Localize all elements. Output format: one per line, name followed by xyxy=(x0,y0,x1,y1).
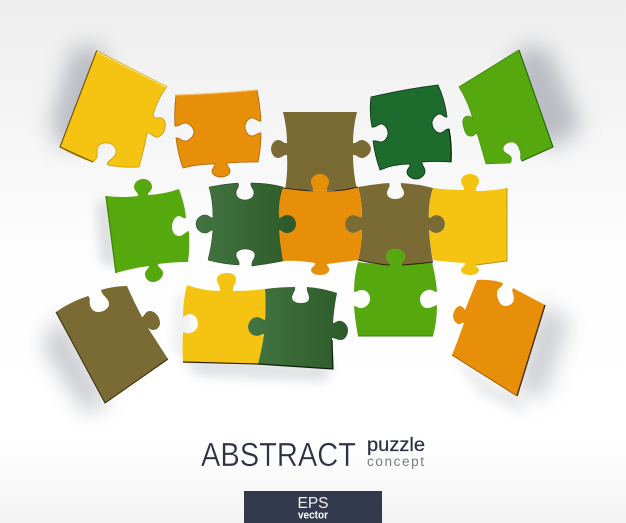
puzzle piece: olive top centre xyxy=(271,112,371,190)
title: ABSTRACT: ABSTRACT xyxy=(201,437,356,474)
badge: EPS vector xyxy=(244,491,382,523)
puzzle piece: orange lower right xyxy=(452,280,545,396)
puzzle piece: yellow top left xyxy=(60,51,167,167)
puzzle piece: bright green lower centre xyxy=(354,249,437,336)
subtitle: concept: concept xyxy=(367,454,424,469)
subtitle: puzzle: puzzle xyxy=(367,435,425,456)
puzzle piece: olive middle xyxy=(345,183,445,265)
puzzle piece: orange top xyxy=(175,90,261,177)
puzzle piece: yellow right middle xyxy=(429,174,507,275)
badge: EPS vector: vector xyxy=(298,510,329,522)
puzzle piece: bright green top right xyxy=(459,50,553,164)
puzzle piece: dark green top xyxy=(370,85,451,179)
puzzle piece: orange centre xyxy=(279,174,362,275)
piece shadows xyxy=(42,45,582,415)
puzzle piece: green left middle xyxy=(106,179,189,282)
puzzle piece: dark green middle xyxy=(196,183,296,266)
puzzle piece: dark green lower xyxy=(248,287,348,369)
puzzle piece: yellow lower xyxy=(182,273,266,364)
puzzle piece: olive lower left xyxy=(56,286,168,403)
badge: EPS vector: EPS xyxy=(298,495,328,512)
